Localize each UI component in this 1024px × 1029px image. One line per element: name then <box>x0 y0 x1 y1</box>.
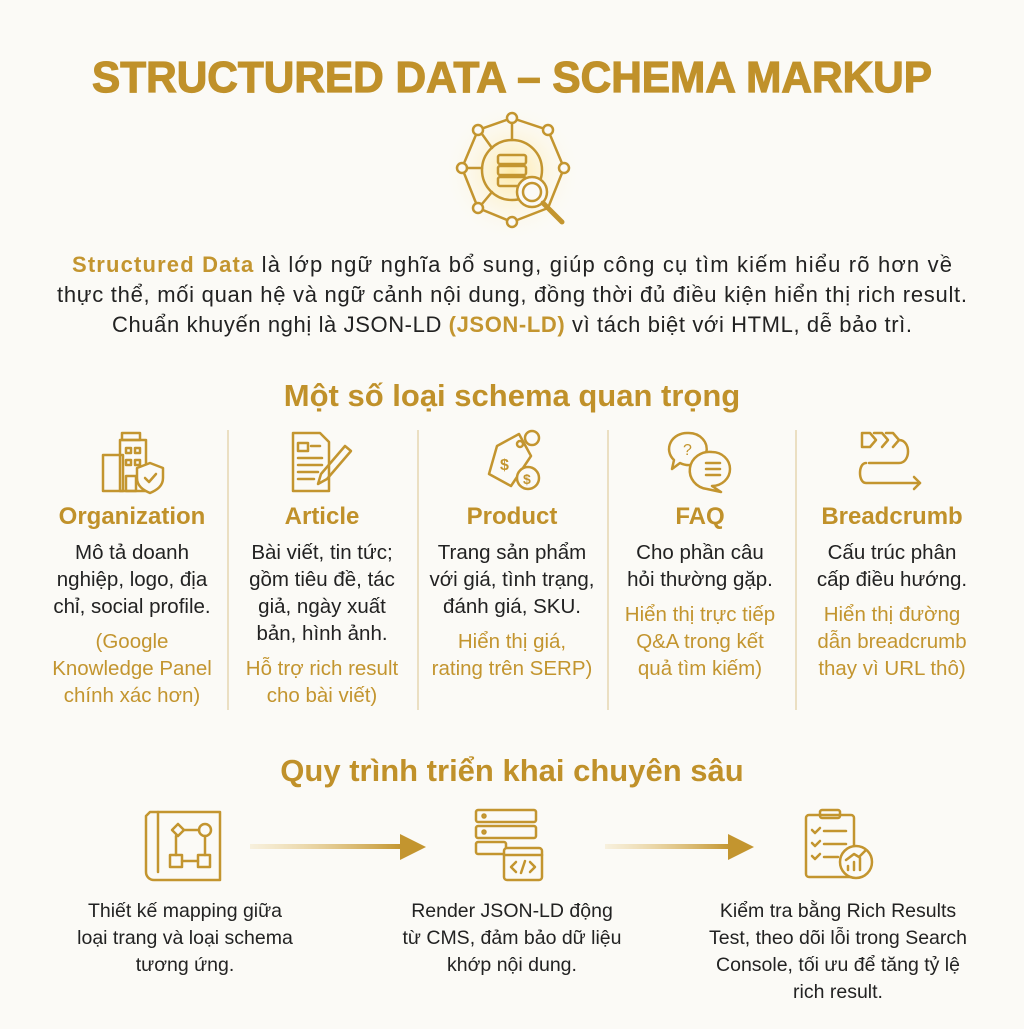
title: STRUCTURED DATA – SCHEMA MARKUP <box>92 53 932 102</box>
icon: data network with magnifier <box>442 102 582 242</box>
icon: checklist clipboard with chart <box>806 810 872 878</box>
arrow 1 <box>250 834 426 860</box>
step 1: tương ứng. <box>136 954 234 976</box>
step 2: khớp nội dung. <box>447 954 577 976</box>
column: Breadcrumb: dẫn breadcrumb <box>817 630 967 653</box>
column: Article: Article <box>285 503 359 530</box>
column: FAQ: FAQ <box>675 503 725 530</box>
step 3: Test, theo dõi lỗi trong Search <box>709 926 967 949</box>
column: FAQ: Hiển thị trực tiếp <box>625 603 775 626</box>
column: Breadcrumb: Cấu trúc phân <box>828 541 956 564</box>
icon: speech bubbles <box>669 433 730 492</box>
intro paragraph <box>57 252 967 337</box>
icon: document with pencil <box>293 433 351 491</box>
step 3: Console, tối ưu để tăng tỷ lệ <box>716 954 960 976</box>
icon: server with code <box>476 810 542 880</box>
icon: price tag with coins <box>489 431 539 489</box>
step 3: rich result. <box>793 981 883 1003</box>
column: Breadcrumb: Hiển thị đường <box>824 603 960 626</box>
step 2 <box>402 810 622 976</box>
column: Article <box>246 433 399 707</box>
column: Breadcrumb: Breadcrumb <box>821 503 963 530</box>
step 3: Kiểm tra bằng Rich Results <box>720 899 956 922</box>
column: Product: với giá, tình trạng, <box>429 568 595 591</box>
column: FAQ: Q&A trong kết <box>636 630 764 653</box>
step 1: Thiết kế mapping giữa <box>88 900 282 922</box>
step 1: loại trang và loại schema <box>77 927 293 949</box>
step 1 <box>77 812 293 976</box>
arrow 2 <box>605 834 754 860</box>
column: Organization: chỉ, social profile. <box>53 595 211 618</box>
column: Article: cho bài viết) <box>267 684 377 707</box>
column: Article: gồm tiêu đề, tác <box>249 568 395 591</box>
column: Article: bản, hình ảnh. <box>256 622 388 645</box>
heading: schema types: Một số loại schema quan trọng <box>284 378 740 413</box>
column: Organization: Mô tả doanh <box>75 541 189 564</box>
icon: breadcrumb path <box>860 433 920 489</box>
icon: blueprint mapping <box>146 812 220 880</box>
column: Organization: Knowledge Panel <box>52 657 212 680</box>
column: Breadcrumb: thay vì URL thô) <box>818 657 966 680</box>
step 2: Render JSON-LD động <box>411 900 613 922</box>
column: Product: đánh giá, SKU. <box>443 595 581 618</box>
step 3 <box>709 810 967 1003</box>
column: Breadcrumb <box>817 433 967 680</box>
step 2: từ CMS, đảm bảo dữ liệu <box>402 927 622 949</box>
icon: speech bubbles: ? <box>683 442 692 459</box>
icon: price tag with coins: $ <box>523 471 531 487</box>
column: Product: Trang sản phẩm <box>438 541 586 564</box>
column: Article: Bài viết, tin tức; <box>251 541 393 564</box>
column: Article: giả, ngày xuất <box>258 595 386 618</box>
column: FAQ <box>625 433 775 680</box>
column: FAQ: hỏi thường gặp. <box>627 568 773 591</box>
column: FAQ: quả tìm kiếm) <box>638 657 762 680</box>
column: Organization: (Google <box>96 630 168 653</box>
column: Product: rating trên SERP) <box>432 657 592 680</box>
intro paragraph: thực thể, mối quan hệ và ngữ cảnh nội dung, đồng thời đủ điều kiện hiển thị rich result. <box>57 282 967 307</box>
intro paragraph: Structured Data là lớp ngữ nghĩa bổ sung, giúp công cụ tìm kiếm hiểu rõ hơn về <box>72 252 952 277</box>
column: FAQ: Cho phần câu <box>636 541 764 564</box>
heading: process: Quy trình triển khai chuyên sâu <box>280 753 744 788</box>
column: Organization: chính xác hơn) <box>64 684 200 707</box>
column: Breadcrumb: cấp điều hướng. <box>817 568 967 591</box>
column: Organization: Organization <box>59 503 205 530</box>
column: Article: Hỗ trợ rich result <box>246 657 399 680</box>
column: Product: Hiển thị giá, <box>458 630 566 653</box>
column: Product <box>429 431 595 680</box>
intro paragraph: Chuẩn khuyến nghị là JSON-LD (JSON-LD) vì tách biệt với HTML, dễ bảo trì. <box>112 312 912 337</box>
icon: building with shield <box>103 433 163 493</box>
icon: price tag with coins: $ <box>500 457 509 474</box>
column: Organization: nghiệp, logo, địa <box>57 568 208 591</box>
column: Organization <box>52 433 212 707</box>
column: Product: Product <box>467 503 557 530</box>
